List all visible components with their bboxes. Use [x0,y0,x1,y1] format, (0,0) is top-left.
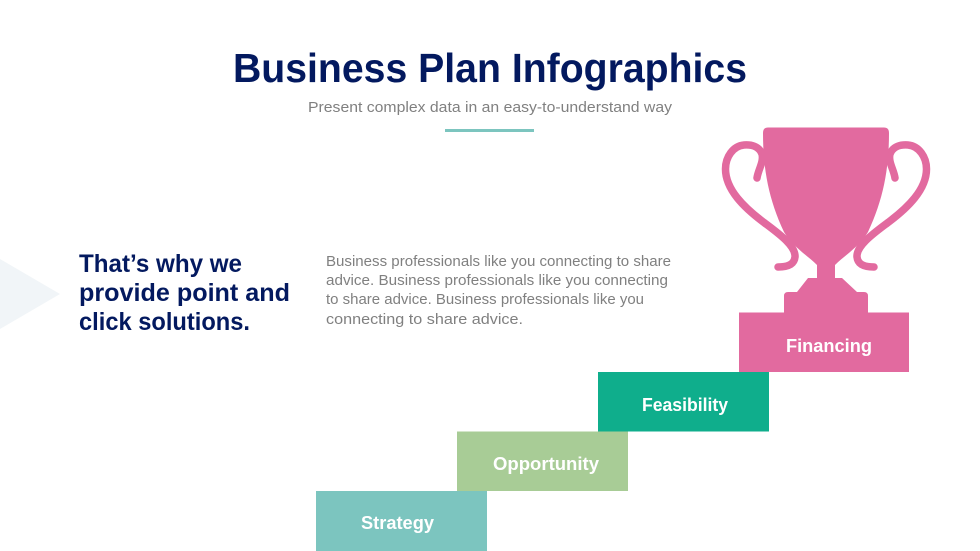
trophy cup, stem and plinth [763,128,889,313]
step: Feasibility: Feasibility [642,394,729,415]
title: Business Plan Infographics [233,45,747,91]
heading: point and click solutions: provide point and [79,279,290,307]
step: Strategy: Strategy [361,512,435,533]
step: Opportunity [457,432,628,491]
body text block: advice. Business professionals like you connecting [326,273,668,289]
decorative arrow at left edge [0,259,60,329]
body text block [326,254,671,328]
trophy left handle [726,145,795,267]
trophy right handle [857,145,926,267]
body text block: Business professionals like you connecting to share [326,254,671,270]
subtitle: Present complex data in an easy-to-understand way [308,99,673,116]
step: Opportunity: Opportunity [493,453,600,474]
step: Financing: Financing [786,335,872,356]
body text block: connecting to share advice. [326,312,523,328]
step: Feasibility [598,372,769,432]
step: Financing [739,312,909,372]
heading: point and click solutions: That’s why we [79,250,242,278]
body text block: to share advice. Business professionals like you [326,292,644,308]
step: Strategy [316,491,487,551]
title underline accent [445,129,534,132]
icon: trophy [726,128,926,313]
heading: point and click solutions [79,250,290,336]
heading: point and click solutions: click solutions. [79,308,250,336]
